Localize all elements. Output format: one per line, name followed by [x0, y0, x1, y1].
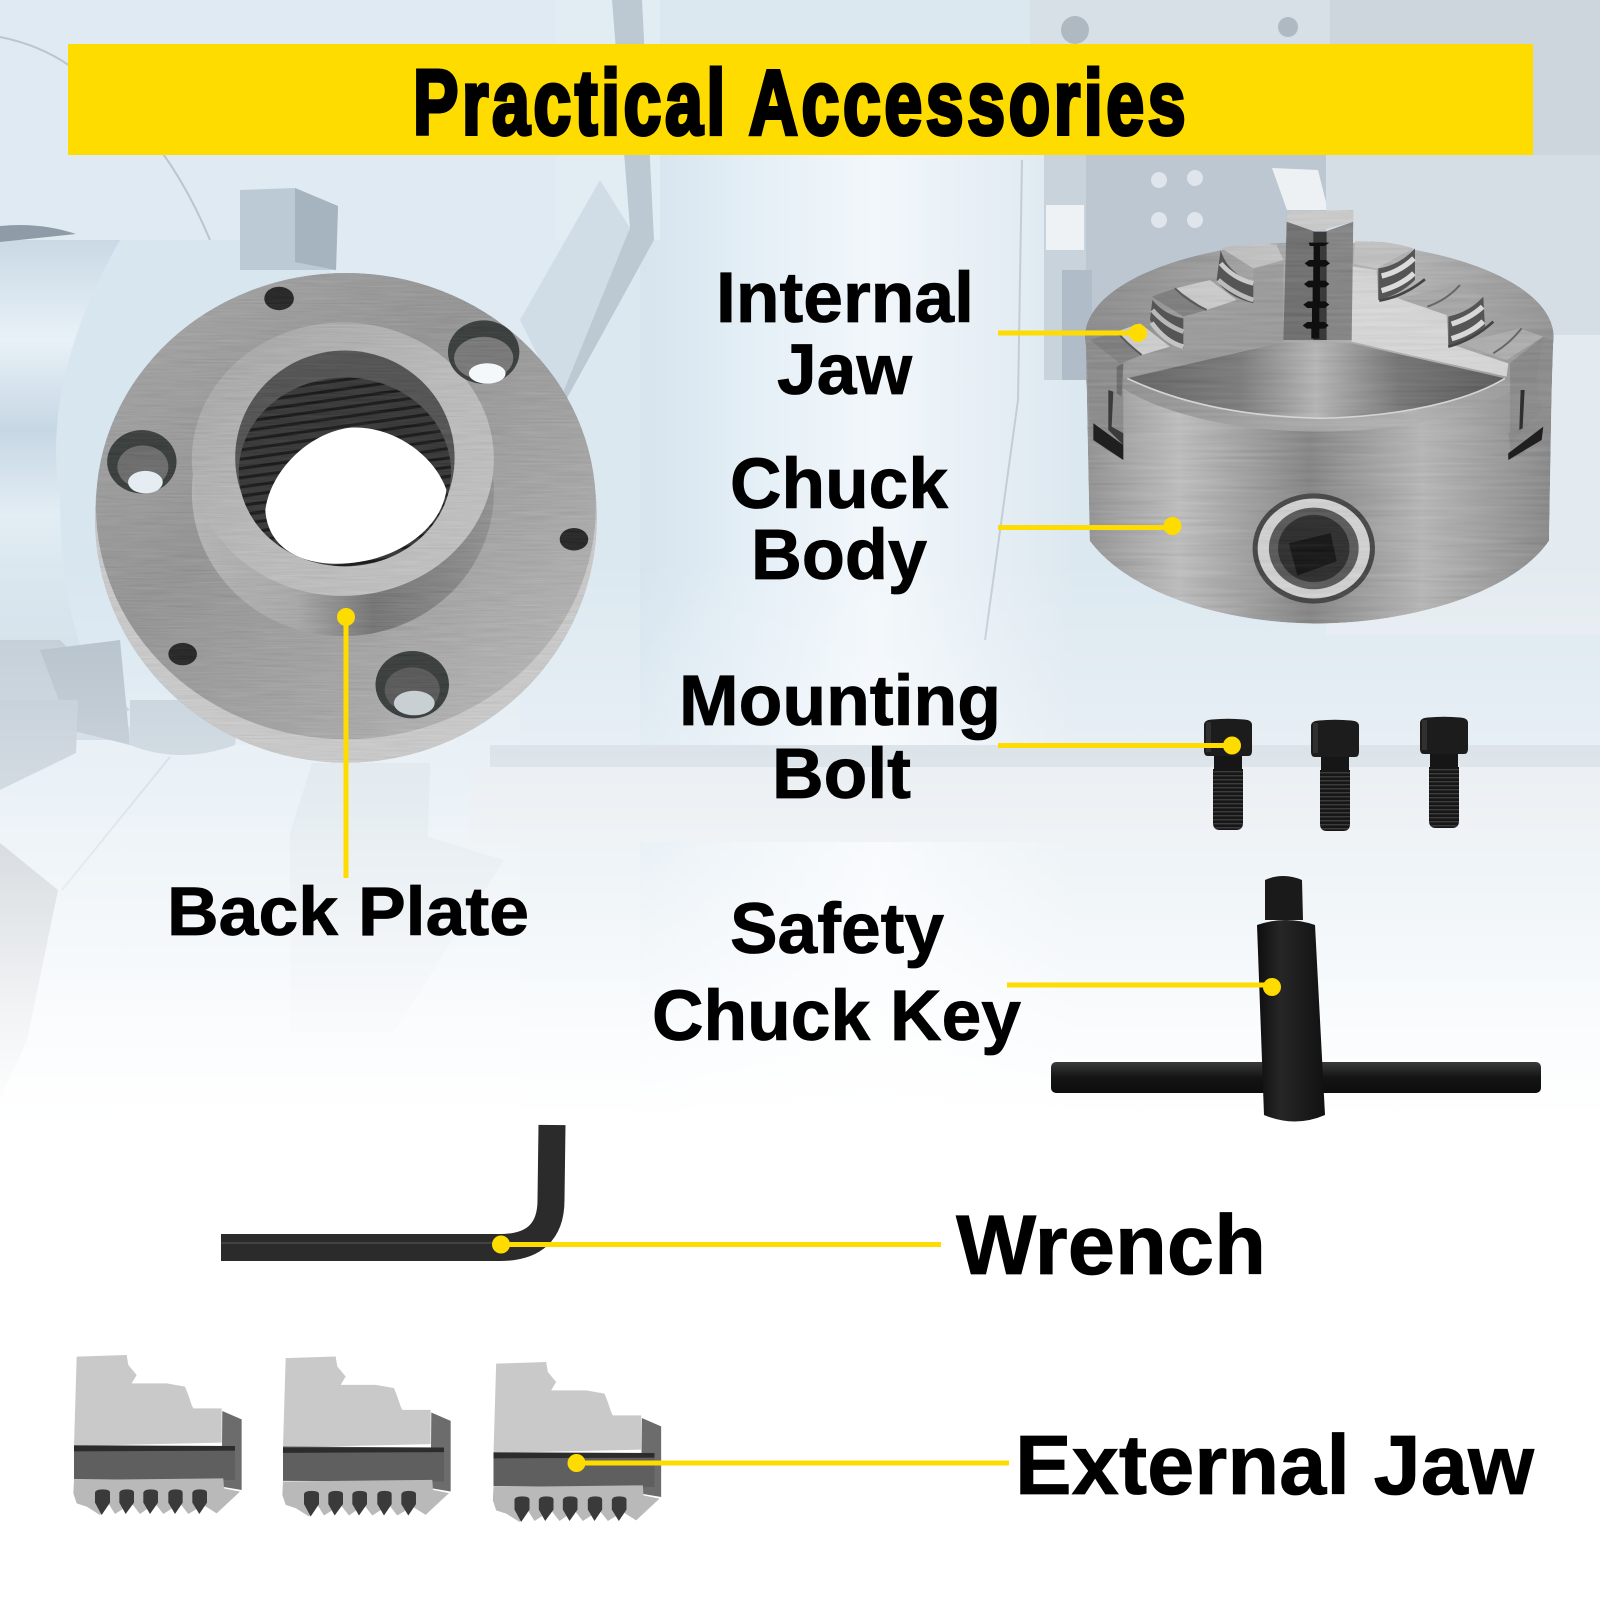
jaw 3 — [493, 1362, 661, 1522]
label: chuck body: Chuck — [730, 445, 949, 524]
three-jaw chuck — [1085, 210, 1554, 623]
leader: chuck body — [998, 517, 1182, 535]
external jaws — [73, 1355, 661, 1522]
leader: external jaw — [568, 1454, 1009, 1472]
label: internal jaw: Internal — [716, 259, 974, 338]
label: back plate: Back Plate — [167, 873, 529, 950]
label: chuck body — [730, 445, 949, 595]
label: internal jaw — [716, 259, 974, 410]
leader: wrench — [492, 1236, 941, 1254]
jaw 1 — [73, 1355, 242, 1515]
chuck body and back face — [1085, 210, 1554, 623]
label: safety chuck key — [652, 890, 1022, 1056]
label: mounting bolt — [679, 662, 1001, 814]
hex wrench — [221, 1125, 552, 1248]
safety chuck key — [1051, 876, 1541, 1122]
label: safety chuck key: Chuck Key — [652, 977, 1022, 1056]
leader: mounting bolt — [998, 736, 1241, 754]
label: safety chuck key: Safety — [730, 890, 945, 969]
label: external jaw: External Jaw — [1015, 1418, 1535, 1512]
label: chuck body: Body — [751, 516, 928, 595]
label: mounting bolt: Bolt — [772, 735, 911, 814]
jaw teeth and machined details — [1093, 232, 1543, 460]
label: internal jaw: Jaw — [777, 331, 913, 410]
mounting bolts — [1204, 717, 1468, 831]
leader: internal jaw — [998, 324, 1147, 342]
label: wrench: Wrench — [956, 1198, 1266, 1292]
back plate — [95, 273, 597, 763]
label: mounting bolt: Mounting — [679, 662, 1001, 741]
leader: safety chuck key — [1007, 978, 1281, 996]
title text: Practical Accessories — [413, 52, 1186, 154]
title banner — [68, 44, 1533, 155]
background: faded lathe workshop photo — [0, 0, 1600, 1120]
leader: back plate — [337, 608, 355, 878]
jaw 2 — [282, 1356, 451, 1516]
